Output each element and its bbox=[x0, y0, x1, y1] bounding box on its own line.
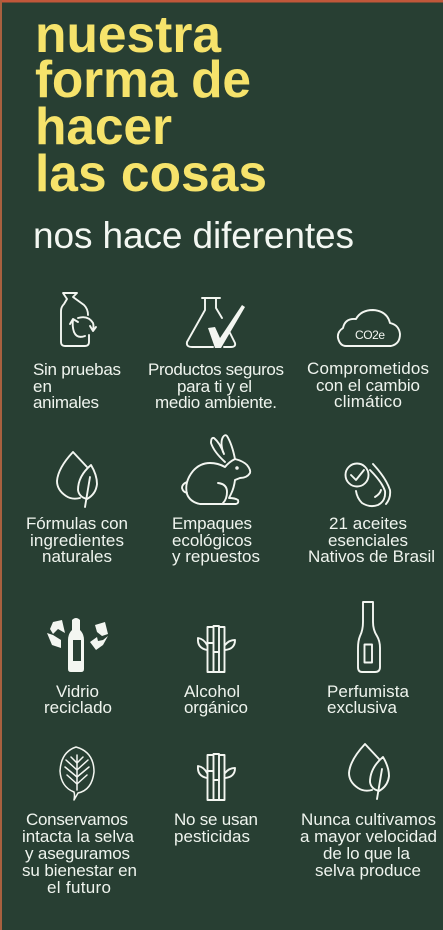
label: exclusiva bbox=[327, 698, 398, 717]
icon: rabbit bbox=[182, 435, 250, 504]
label: de lo que la bbox=[323, 844, 411, 863]
label: Vidrio bbox=[56, 682, 99, 701]
icon: sugar cane bbox=[198, 626, 235, 672]
label bbox=[26, 514, 128, 566]
label bbox=[44, 682, 112, 717]
label: Perfumista bbox=[327, 682, 410, 701]
title: las cosas bbox=[35, 144, 267, 202]
icon: veined leaf bbox=[60, 747, 94, 800]
label: Fórmulas con bbox=[26, 514, 128, 533]
label: a mayor velocidad bbox=[300, 827, 437, 846]
icon: drop and leaf bbox=[57, 452, 97, 507]
label: naturales bbox=[42, 547, 112, 566]
item: productos seguros bbox=[148, 298, 284, 412]
icon: oil drop with check bbox=[346, 464, 390, 506]
label bbox=[327, 682, 410, 717]
item: alcohol organico bbox=[184, 626, 248, 717]
title: forma de bbox=[35, 50, 251, 108]
label: con el cambio bbox=[316, 376, 420, 395]
label bbox=[308, 514, 435, 566]
label: Sin pruebas bbox=[33, 360, 121, 379]
label bbox=[300, 810, 437, 880]
item: formulas con ingredientes naturales bbox=[26, 452, 128, 566]
label: orgánico bbox=[184, 698, 248, 717]
label: ingredientes bbox=[30, 531, 124, 550]
label: reciclado bbox=[44, 698, 112, 717]
label: y repuestos bbox=[172, 547, 260, 566]
label: para ti y el bbox=[177, 377, 252, 396]
label bbox=[307, 359, 429, 411]
label bbox=[172, 514, 260, 566]
icon: flask with check mark bbox=[187, 298, 245, 348]
label: Comprometidos bbox=[307, 359, 429, 378]
icon: drop and leaf bbox=[349, 744, 389, 799]
item: no se usan pesticidas bbox=[174, 754, 258, 846]
icon: slim bottle bbox=[358, 602, 380, 672]
item: conservamos la selva bbox=[22, 747, 137, 897]
label bbox=[33, 360, 121, 412]
icon: CO2e cloud: CO2e bbox=[355, 328, 385, 342]
label: climático bbox=[334, 392, 402, 411]
label: ecológicos bbox=[172, 531, 252, 550]
item: vidrio reciclado bbox=[44, 618, 112, 717]
item: perfumista exclusiva bbox=[327, 602, 410, 717]
icon: bottle with recycle arrows bbox=[61, 293, 96, 346]
item: 21 aceites esenciales bbox=[308, 464, 435, 566]
item: sin pruebas en animales bbox=[33, 293, 121, 412]
label: el futuro bbox=[47, 878, 111, 897]
icon: solid bottle with recycle arrows bbox=[47, 618, 108, 672]
label: pesticidas bbox=[174, 827, 250, 846]
item: nunca cultivamos a mayor velocidad bbox=[300, 744, 437, 880]
label: Alcohol bbox=[184, 682, 240, 701]
label: esenciales bbox=[328, 531, 408, 550]
icon: sugar cane bbox=[198, 754, 235, 800]
label: Productos seguros bbox=[148, 360, 284, 379]
title: nuestra bbox=[35, 5, 221, 63]
label: y aseguramos bbox=[25, 844, 130, 863]
label: 21 aceites bbox=[329, 514, 407, 533]
label: medio ambiente. bbox=[155, 393, 277, 412]
label bbox=[184, 682, 248, 717]
label: Empaques bbox=[172, 514, 252, 533]
label: su bienestar en bbox=[22, 861, 137, 880]
title: hacer bbox=[35, 97, 172, 155]
label: en bbox=[33, 377, 52, 396]
label: Conservamos bbox=[26, 810, 128, 829]
label: animales bbox=[33, 393, 99, 412]
label: Nunca cultivamos bbox=[301, 810, 436, 829]
label: No se usan bbox=[174, 810, 258, 829]
title bbox=[35, 5, 267, 202]
item: empaques ecologicos y repuestos bbox=[172, 435, 260, 566]
label bbox=[22, 810, 137, 897]
item: comprometidos con el cambio climatico bbox=[307, 310, 429, 411]
subtitle: nos hace diferentes bbox=[33, 215, 354, 256]
label: selva produce bbox=[315, 861, 421, 880]
label bbox=[148, 360, 284, 412]
label bbox=[174, 810, 258, 846]
label: intacta la selva bbox=[22, 827, 135, 846]
label: Nativos de Brasil bbox=[308, 547, 435, 566]
